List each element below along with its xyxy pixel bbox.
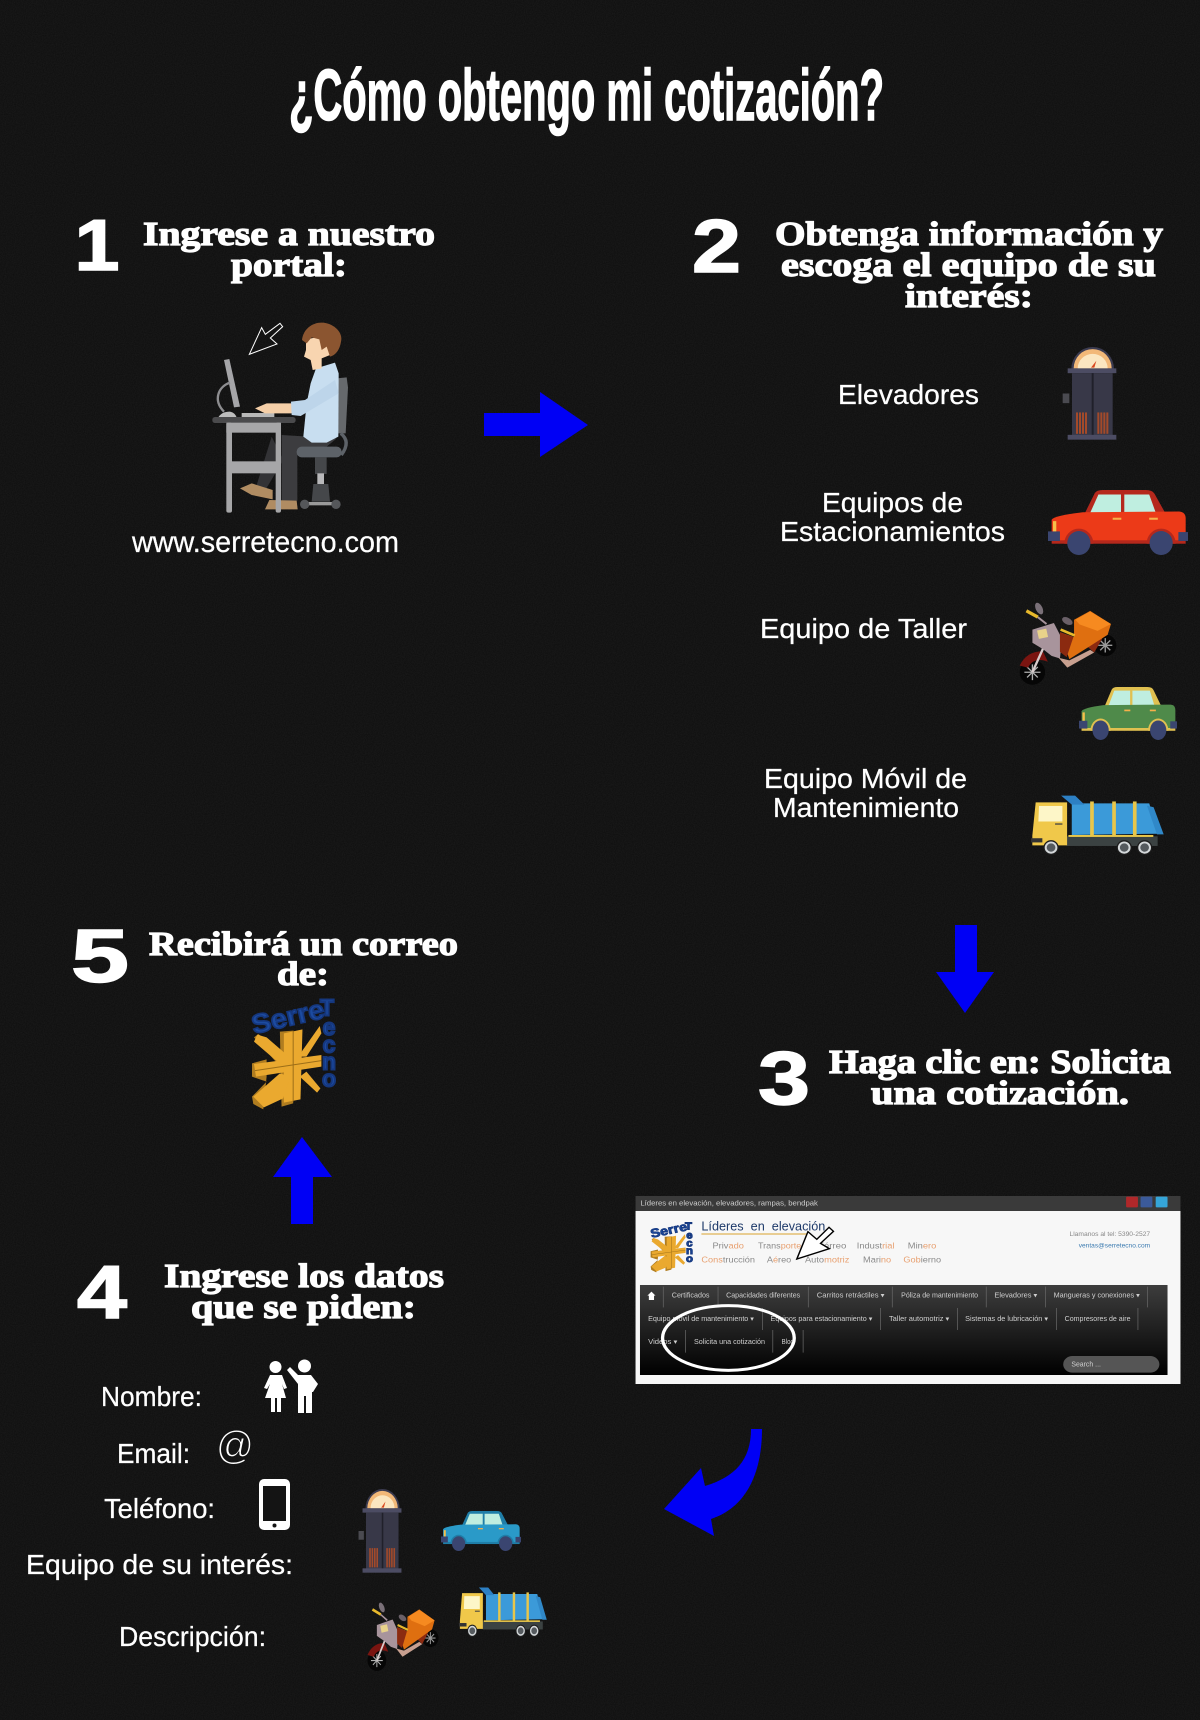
website screenshot: Search ... [1071, 1360, 1101, 1369]
step 1 panel: enter portal [74, 206, 435, 559]
arrow: step 1 to step 2 [484, 392, 588, 457]
illustration: person at computer with cursor [212, 323, 348, 513]
icon: couple [264, 1360, 318, 1413]
label: Nombre: Nombre: [101, 1381, 202, 1412]
icon: green car [1079, 687, 1177, 740]
icon: elevator small [359, 1489, 401, 1573]
website screenshot: Férreo [818, 1241, 847, 1250]
website screenshot: Sistemas de lubricación ▾ [965, 1314, 1048, 1323]
icon: truck small [459, 1588, 547, 1637]
website screenshot: Industrial [857, 1241, 894, 1250]
step 5 heading: de: [277, 956, 329, 993]
website screenshot: Elevadores ▾ [994, 1291, 1038, 1300]
icon: red car [1048, 490, 1188, 555]
icon: smartphone [259, 1479, 290, 1530]
step 3 heading: Haga clic en: Solicita [829, 1044, 1171, 1081]
step 3 number: 3 [758, 1036, 810, 1120]
step 2 number: 2 [692, 204, 741, 288]
website screenshot: Equipo móvil de mantenimiento ▾ [648, 1314, 754, 1323]
website screenshot: Mangueras y conexiones ▾ [1054, 1291, 1140, 1300]
label: Equipo de Taller: Equipo de Taller [760, 613, 967, 644]
label: Equipo Móvil de Mantenimiento: Equipo Móvil de [764, 763, 967, 794]
website screenshot: Solicita una cotización [694, 1337, 765, 1346]
website screenshot: Carritos retráctiles ▾ [817, 1291, 885, 1300]
label: Teléfono: Teléfono: [104, 1493, 215, 1524]
step 3 heading: una cotización. [871, 1075, 1129, 1112]
portal url: www.serretecno.com [131, 526, 399, 559]
label: Equipo de su interés: Equipo de su interés: [26, 1549, 293, 1580]
icon: elevator [1063, 347, 1116, 440]
website screenshot: Taller automotriz ▾ [889, 1314, 950, 1323]
website screenshot: Certificados [672, 1291, 710, 1300]
website screenshot: Compresores de aire [1065, 1314, 1131, 1323]
step 3 panel: click request quote [636, 1036, 1180, 1384]
website screenshot: ventas@serretecno.com [1079, 1243, 1151, 1249]
step 2 panel: choose equipment [692, 204, 1188, 855]
label: Equipo Móvil de Mantenimiento: Mantenimiento [773, 792, 959, 823]
icon: at sign: @ [216, 1424, 254, 1468]
label: Descripción: Descripción: [119, 1621, 266, 1652]
step 1 heading: portal: [231, 247, 347, 284]
step 5 panel: receive email [71, 914, 458, 1109]
step 4 number: 4 [77, 1250, 127, 1334]
website screenshot: Líderes en elevación, elevadores, rampas, bendpak [640, 1199, 818, 1207]
arrow: step 4 to step 5 [273, 1137, 332, 1224]
step 5 number: 5 [71, 914, 129, 998]
website screenshot: Construcción [701, 1255, 755, 1265]
logo: SerreTecno [249, 994, 336, 1109]
website screenshot: Capacidades diferentes [726, 1291, 800, 1300]
label: Equipos de Estacionamientos: Estacionamientos [780, 516, 1005, 547]
arrow: step 2 to step 3 [936, 925, 994, 1013]
website screenshot: Transporte [758, 1241, 802, 1250]
website screenshot: Videos ▾ [648, 1337, 678, 1346]
label: Equipos de Estacionamientos: Equipos de [822, 487, 963, 518]
website screenshot: Privado [712, 1241, 744, 1250]
step 2 heading: escoga el equipo de su [781, 247, 1156, 284]
website screenshot: Líderes en elevación [701, 1219, 825, 1234]
website screenshot [636, 1196, 1180, 1384]
website screenshot: Automotriz [805, 1255, 849, 1265]
website screenshot: Marino [863, 1255, 891, 1265]
website screenshot: Póliza de mantenimiento [901, 1291, 978, 1300]
step 1 heading: Ingrese a nuestro [143, 216, 435, 253]
step 2 heading: interés: [905, 278, 1033, 315]
step 2 heading: Obtenga información y [775, 216, 1163, 253]
website screenshot: Gobierno [903, 1255, 941, 1265]
step 4 heading: Ingrese los datos [164, 1258, 444, 1295]
website screenshot: Llamanos al tel: 5390-2527 [1069, 1231, 1150, 1238]
website screenshot: Equipos para estacionamiento ▾ [771, 1314, 873, 1323]
step 1 number: 1 [74, 206, 120, 286]
step 4 panel: enter data [26, 1250, 547, 1671]
step 5 heading: Recibirá un correo [149, 926, 458, 963]
curved arrow: step 3 to step 4 [664, 1429, 762, 1536]
label: Email: Email: [117, 1438, 190, 1469]
icon: truck [1031, 796, 1164, 855]
icon: motorcycle small [367, 1602, 439, 1671]
step 4 heading: que se piden: [191, 1289, 416, 1326]
website screenshot: Aéreo [767, 1255, 791, 1265]
icon: motorcycle [1020, 602, 1116, 685]
website screenshot: Minero [908, 1241, 936, 1250]
website screenshot: Blog [782, 1337, 794, 1346]
label: Elevadores: Elevadores [838, 379, 979, 410]
icon: blue car [441, 1511, 521, 1551]
